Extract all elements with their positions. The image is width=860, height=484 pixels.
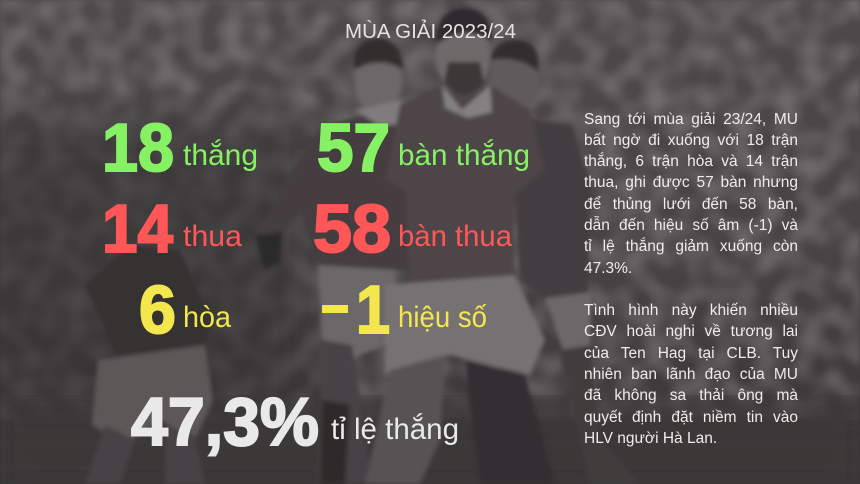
- stat: 14 losses: thua: [183, 220, 242, 253]
- body text column: để thủng lưới đến 58 bàn,: [584, 196, 798, 213]
- body text column: [584, 110, 798, 447]
- stat: 57 goals scored: bàn thắng: [398, 139, 530, 172]
- body text column: Sang tới mùa giải 23/24, MU: [584, 110, 798, 128]
- body text column: HLV người Hà Lan.: [584, 430, 717, 447]
- stat: -1 goal difference: [322, 272, 487, 348]
- stat: 58 goals conceded: bàn thua: [398, 220, 512, 253]
- stat: -1 goal difference: 1: [356, 272, 390, 348]
- body text column: CĐV hoài nghi về tương lai: [584, 323, 798, 340]
- body text column: nhiên ban lãnh đạo của MU: [584, 366, 798, 383]
- stat: 58 goals conceded: [313, 191, 512, 267]
- body text column: đã không sa thải ông mà: [584, 387, 798, 404]
- stat: 14 losses: [102, 191, 242, 267]
- stat: 57 goals scored: 57: [317, 110, 390, 186]
- right player jersey: [510, 115, 590, 305]
- body text column: thắng, 6 trận hòa và 14 trận: [584, 153, 798, 170]
- stat: 18 wins: 18: [102, 110, 174, 186]
- stat: 6 draws: [139, 272, 231, 348]
- stat: 47,3% win rate: 47,3%: [131, 384, 319, 460]
- body text column: tỉ lệ thắng giảm xuống còn: [584, 238, 798, 255]
- body text column: bất ngờ đi xuống với 18 trận: [584, 132, 798, 149]
- stat: 18 wins: thắng: [183, 139, 258, 172]
- left player: [258, 105, 420, 270]
- body text column: của Ten Hag tại CLB. Tuy: [584, 345, 798, 362]
- stat: 6 draws: hòa: [183, 301, 231, 334]
- body text column: quyết định đặt niềm tin vào: [584, 409, 798, 426]
- left lower player: [85, 245, 210, 365]
- body text column: 47.3%.: [584, 260, 632, 277]
- stat: -1 goal difference: hiệu số: [398, 301, 487, 334]
- stat: 58 goals conceded: 58: [313, 191, 391, 267]
- body text column: dẫn đến hiệu số âm (-1) và: [584, 217, 798, 234]
- stat: 57 goals scored: [317, 110, 530, 186]
- stat: 14 losses: 14: [102, 191, 173, 267]
- stat: 47,3% win rate: [131, 384, 459, 460]
- title: MÙA GIẢI 2023/24: [345, 20, 516, 43]
- centre player: [385, 85, 545, 290]
- stat: 6 draws: 6: [139, 272, 176, 348]
- stat: 47,3% win rate: tỉ lệ thắng: [331, 413, 459, 446]
- body text column: Tình hình này khiến nhiều: [584, 302, 798, 319]
- stat: 18 wins: [102, 110, 258, 186]
- body text column: thua, ghi được 57 bàn nhưng: [584, 174, 798, 191]
